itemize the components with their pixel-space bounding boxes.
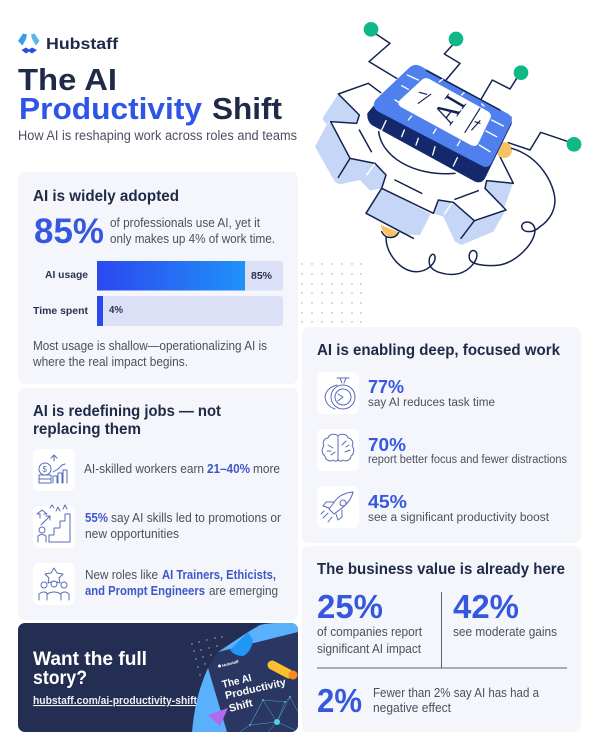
- big stat 85%: 85%: [34, 212, 104, 251]
- stat 45%: 45%: [368, 491, 407, 512]
- new roles text: New roles like: [85, 568, 158, 582]
- stat 77%: say AI reduces task time: [368, 397, 495, 409]
- stat 25%: of companies report: [317, 625, 422, 639]
- icon: brain: [317, 429, 359, 471]
- stat 77%: [368, 376, 495, 409]
- icon: rocket: [317, 486, 359, 528]
- takeaway text: [32, 339, 267, 369]
- earnings text: [84, 462, 280, 476]
- illustration: AI chip on a gear: [315, 22, 581, 274]
- wires: [369, 33, 568, 150]
- earnings text: AI-skilled workers earn: [84, 462, 204, 476]
- cta heading: Want the full: [33, 648, 147, 670]
- stat 42%: see moderate gains: [453, 625, 557, 639]
- bar chart: 85%: [251, 270, 273, 282]
- title: Shift: [212, 91, 282, 126]
- report cover: Shift: [228, 697, 254, 715]
- logo: Hubstaff: Hubstaff: [46, 36, 119, 53]
- new roles text: AI Trainers, Ethicists,: [162, 568, 276, 582]
- takeaway text: where the real impact begins.: [32, 355, 188, 369]
- chip lettering: AI: [426, 89, 473, 130]
- stat description: only makes up 4% of work time.: [110, 232, 275, 246]
- connector dots: [381, 142, 512, 237]
- stat 45%: [368, 491, 550, 524]
- chip screen: [398, 78, 491, 146]
- stat description: [110, 216, 275, 246]
- icon: climbing stairs with stars: [33, 505, 75, 548]
- promotions text: 55%: [85, 511, 108, 525]
- panel: call to action: [18, 623, 298, 732]
- takeaway text: Most usage is shallow—operationalizing AI is: [33, 339, 267, 353]
- heading: AI is redefining jobs — not: [33, 403, 222, 420]
- stat 70%: report better focus and fewer distractions: [368, 454, 567, 466]
- cta heading: story?: [33, 667, 87, 689]
- stat 2%: Fewer than 2% say AI has had a: [373, 686, 539, 700]
- stat 70%: 70%: [368, 434, 406, 455]
- bar chart: Time spent: [33, 305, 88, 317]
- chip top: [374, 65, 512, 167]
- stat 2%: negative effect: [373, 701, 451, 715]
- earnings text: more: [253, 462, 280, 476]
- title: [18, 62, 282, 126]
- promotions text: say AI skills led to promotions or: [111, 511, 281, 525]
- stat 2%: 2%: [317, 682, 362, 719]
- chip ticks: [395, 75, 503, 152]
- cta link: hubstaff.com/ai-productivity-shift: [33, 695, 197, 707]
- gear shadow: [315, 94, 513, 245]
- cta heading: [33, 648, 147, 689]
- icon: coins and rising chart: $: [42, 465, 48, 474]
- icon: stopwatch: [317, 372, 359, 414]
- panel: AI is widely adopted: [18, 172, 298, 384]
- subtitle: How AI is reshaping work across roles and teams: [18, 128, 297, 143]
- new roles text: are emerging: [209, 584, 278, 598]
- stat 77%: 77%: [368, 376, 404, 397]
- logo: Hubstaff: [18, 34, 119, 54]
- icon: team with star: [33, 563, 75, 605]
- report cover: Productivity: [224, 676, 287, 702]
- bar chart: 4%: [109, 304, 124, 316]
- heading: AI is widely adopted: [33, 188, 179, 205]
- heading: The business value is already here: [317, 561, 565, 578]
- icon: coins and rising chart: [33, 449, 75, 491]
- stat 25%: significant AI impact: [317, 642, 421, 656]
- stat 25%: 25%: [317, 588, 383, 625]
- stat 45%: see a significant productivity boost: [368, 512, 550, 524]
- report cover: The AI: [221, 672, 253, 691]
- panel: deep focused work: [302, 327, 581, 543]
- earnings text: 21–40%: [207, 462, 250, 476]
- panel: business value: [302, 546, 581, 732]
- bar chart: [33, 261, 283, 326]
- promotions text: new opportunities: [85, 527, 179, 541]
- heading: [33, 403, 222, 438]
- heading: AI is enabling deep, focused work: [317, 342, 560, 359]
- stat 25%: [317, 588, 422, 656]
- promotions text: [85, 511, 281, 541]
- report cover: [191, 623, 298, 732]
- title: Productivity: [19, 91, 203, 126]
- chip body: [367, 106, 512, 182]
- stat description: of professionals use AI, yet it: [110, 216, 260, 230]
- bar chart: AI usage: [45, 269, 88, 281]
- title: The AI: [18, 62, 117, 97]
- stat 2%: [317, 682, 539, 719]
- curly wire: [386, 148, 555, 274]
- heading: replacing them: [33, 421, 141, 438]
- new roles text: [85, 568, 278, 598]
- dot grid: [301, 263, 362, 323]
- stat 42%: [453, 588, 557, 639]
- panel: AI is redefining jobs: [18, 388, 298, 620]
- gear outline: [331, 83, 513, 238]
- stat 42%: 42%: [453, 588, 519, 625]
- new roles text: and Prompt Engineers: [85, 584, 205, 598]
- green nodes: [364, 22, 581, 152]
- stat 70%: [368, 434, 567, 466]
- report cover: Hubstaff: [221, 659, 240, 668]
